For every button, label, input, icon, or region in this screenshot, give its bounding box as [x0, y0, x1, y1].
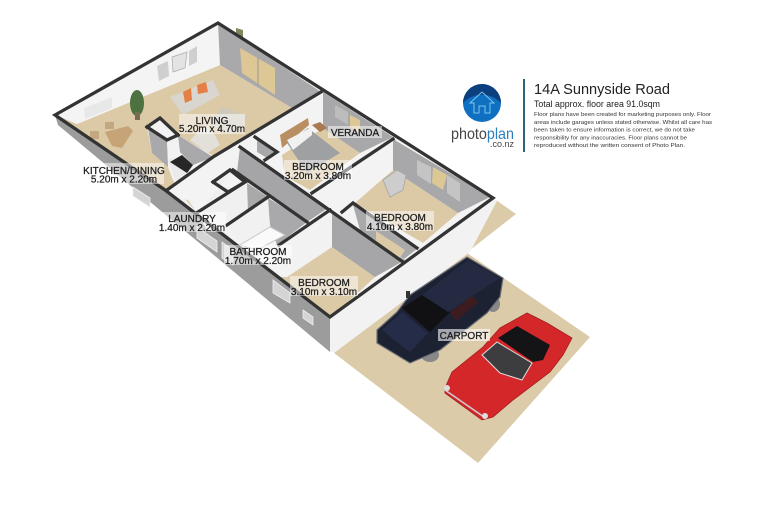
- room label: bedroom front: BEDROOM: [298, 278, 350, 289]
- front bedroom walls: [278, 210, 405, 277]
- disclaimer: areas include garages unless stated otherwise. Whilst all care has: [534, 120, 712, 126]
- room label: bedroom right: 4.10m x 3.80m: [367, 222, 433, 233]
- bedroom window: [417, 160, 460, 202]
- bed: [280, 118, 340, 173]
- exterior windows: [133, 187, 313, 325]
- header divider: [523, 79, 525, 152]
- kitchen cabinets: [148, 122, 213, 180]
- dining table and chairs: [90, 122, 133, 148]
- disclaimer: been taken to ensure information is correct, we do not take: [534, 128, 695, 134]
- veranda window: [335, 105, 360, 133]
- plant: [130, 90, 144, 120]
- wall tops: [55, 23, 493, 317]
- living back wall: [57, 23, 321, 124]
- room label: kitchen/dining: 5.20m x 2.20m: [91, 174, 157, 186]
- room label: bedroom front: [290, 276, 358, 298]
- address title: 14A Sunnyside Road: [534, 81, 670, 98]
- room label: living: [179, 114, 245, 135]
- room label: bedroom right: [366, 211, 434, 233]
- room floors: [55, 65, 458, 317]
- veranda door: [236, 28, 275, 95]
- disclaimer: responsibility for any inaccuracies. Floor plans cannot be: [534, 136, 687, 142]
- disclaimer: reproduced without the written consent of Photo Plan.: [534, 143, 686, 149]
- middle bedroom walls: [240, 92, 393, 173]
- laundry walls: [197, 172, 268, 232]
- photoplan logo: .co.nz: [490, 139, 514, 149]
- bathroom with bath: [227, 198, 307, 250]
- photoplan logo: photoplan: [451, 126, 514, 143]
- carport floor: [334, 200, 590, 463]
- room label: laundry: [158, 212, 226, 234]
- room label: bedroom right: BEDROOM: [374, 213, 426, 224]
- room label: bedroom middle: 3.20m x 3.80m: [285, 171, 351, 182]
- disclaimer: Floor plans have been created for marketing purposes only. Floor: [534, 112, 711, 118]
- room label: bedroom middle: BEDROOM: [292, 162, 344, 173]
- room label: laundry: 1.40m x 2.20m: [159, 223, 225, 234]
- room label: bathroom: [224, 245, 292, 267]
- living rug and coffee table: [190, 107, 248, 153]
- room label: bathroom: BATHROOM: [229, 247, 287, 258]
- room label: laundry: LAUNDRY: [168, 214, 216, 225]
- house exterior walls: [55, 23, 497, 352]
- living window and curtains: [84, 46, 197, 119]
- room label: living: 5.20m x 4.70m: [179, 124, 245, 135]
- room label: carport: CARPORT: [440, 331, 488, 342]
- room label: veranda: VERANDA: [331, 128, 379, 139]
- armchair: [383, 170, 406, 197]
- room label: bedroom middle: [284, 160, 352, 182]
- sofa: [170, 80, 220, 115]
- room label: kitchen/dining: KITCHEN/DINING: [83, 166, 165, 177]
- photoplan logo: [451, 84, 514, 149]
- right bedroom walls: [312, 139, 490, 259]
- room label: bedroom front: 3.10m x 3.10m: [291, 287, 357, 298]
- disclaimer: [534, 112, 712, 149]
- total floor area: Total approx. floor area 91.0sqm: [534, 99, 660, 109]
- room label: bathroom: 1.70m x 2.20m: [225, 256, 291, 267]
- room label: kitchen/dining: [83, 163, 165, 186]
- hallway wall faces: [167, 147, 328, 222]
- room label: living: LIVING: [196, 116, 229, 127]
- red car: [444, 313, 572, 420]
- blue car: [377, 257, 503, 363]
